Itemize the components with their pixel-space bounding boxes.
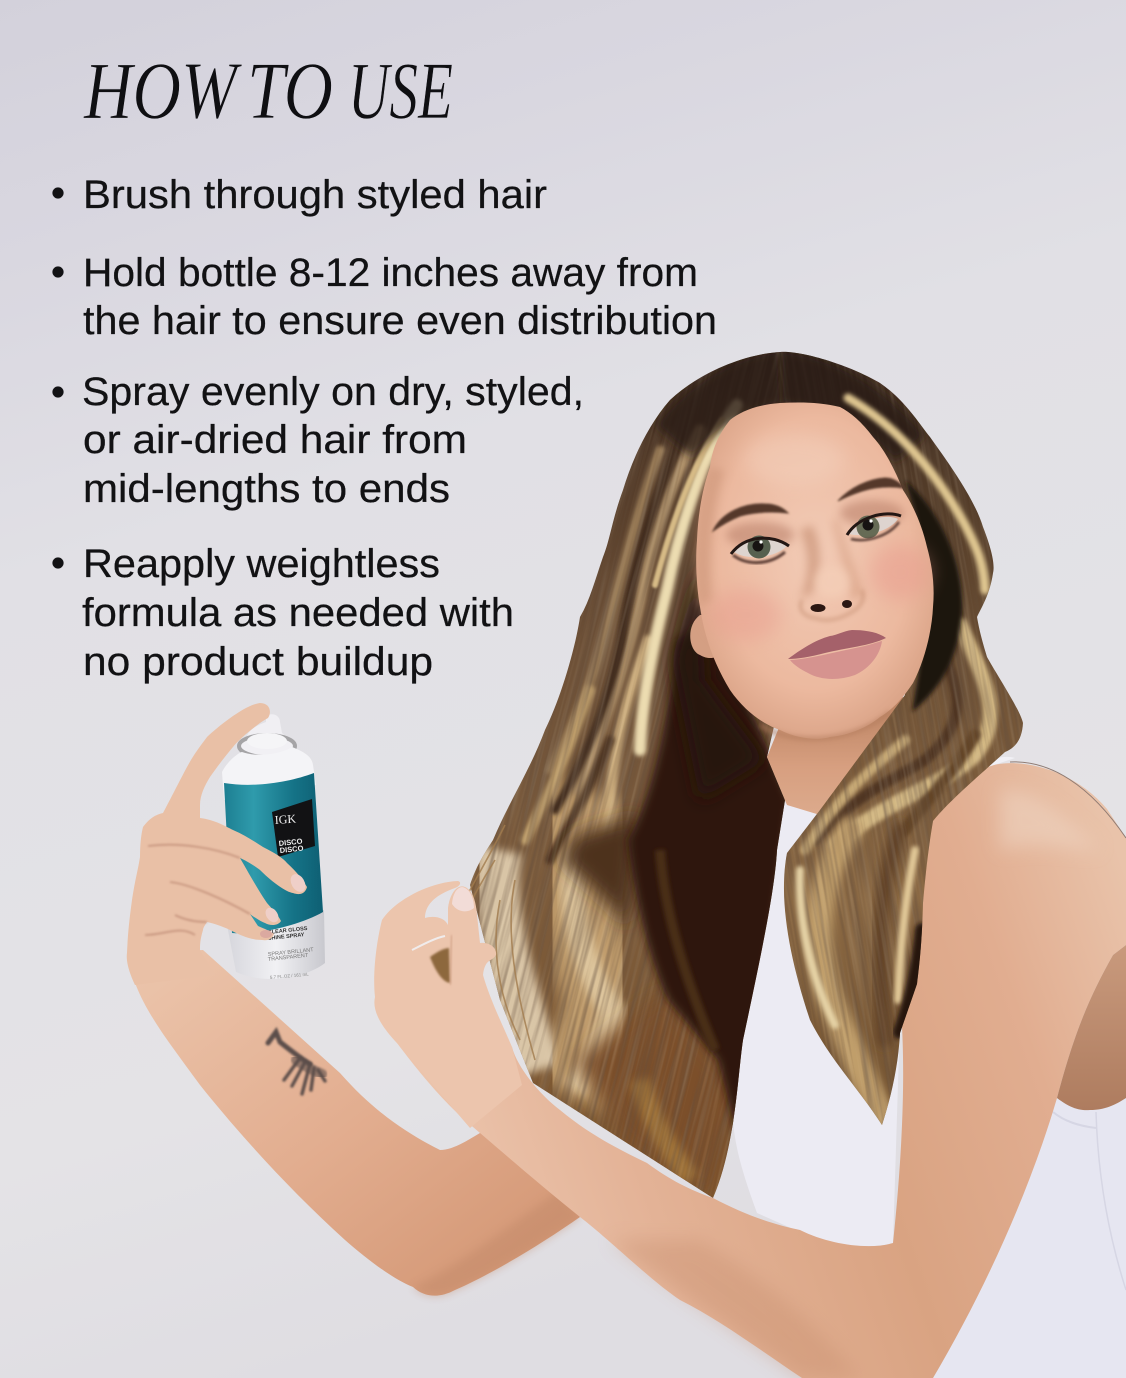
step 1: Brush through styled hair: [83, 173, 547, 217]
left hand fingers: [127, 703, 308, 985]
right arm and shoulder: [374, 762, 1126, 1378]
chin shadow: [760, 712, 890, 739]
step 3: or air-dried hair from: [83, 418, 467, 462]
bottle: DISCO: [279, 844, 304, 855]
strand between fingers: [430, 948, 450, 983]
small print: [268, 926, 315, 980]
sparse blond ends: [497, 850, 540, 1070]
lower arm shade: [610, 1240, 860, 1378]
step 2: the hair to ensure even distribution: [83, 299, 717, 343]
face: [690, 402, 934, 739]
step 4: Reapply weightless: [83, 542, 440, 586]
small print: SPRAY BRILLANT: [268, 947, 315, 958]
black label: [272, 799, 315, 857]
hair, right side: [780, 352, 1023, 1125]
small print: SHINE SPRAY: [268, 932, 305, 942]
neck: [767, 695, 925, 815]
shoulder line: [1010, 762, 1126, 838]
shoulder strap sliver: [975, 757, 1015, 768]
small print: TRANSPARENT: [268, 953, 309, 963]
teal band: [224, 773, 323, 933]
nails: [288, 872, 308, 894]
title: TO: [247, 45, 333, 136]
strand texture: [784, 352, 1020, 1122]
thumb nail: [452, 887, 474, 911]
bottle: DISCO: [278, 837, 303, 848]
eye sockets: [726, 522, 794, 548]
eye: right: [847, 514, 901, 540]
step 3: Spray evenly on dry, styled,: [82, 370, 584, 414]
small print: 5.7 FL.OZ / 161 mL: [270, 972, 309, 980]
nose: [800, 566, 863, 620]
main highlight: [640, 405, 737, 750]
flyaway strands: [437, 825, 535, 1060]
nose bridge shade: [800, 525, 820, 600]
back of the torso: [1057, 945, 1126, 1110]
face-framing highlights: [525, 430, 700, 860]
cheek blush: [709, 589, 781, 641]
step 3: [52, 370, 584, 511]
left arm with tattoo: [127, 950, 580, 1296]
title: USE: [348, 45, 453, 136]
step 2: Hold bottle 8-12 inches away from: [83, 251, 698, 295]
step 2: [52, 251, 717, 343]
shoulder highlight: [1000, 789, 1100, 850]
side shading near hairline: [696, 467, 725, 607]
crown darkness: [655, 350, 782, 458]
woman: [127, 251, 1126, 1378]
eyebrows: [713, 504, 788, 531]
title: HOW: [83, 45, 242, 136]
lower brown: [575, 990, 740, 1200]
body lower: [227, 910, 325, 979]
body top: [222, 747, 316, 800]
brand: IGK: [274, 812, 297, 827]
eye: left: [731, 536, 789, 563]
step 4: formula as needed with: [82, 591, 514, 635]
collar: [239, 735, 295, 757]
dark behind face: [905, 480, 962, 712]
dark patch upper mid: [560, 815, 640, 925]
tattoo: [268, 1032, 325, 1094]
bottle: [222, 714, 325, 980]
instructions list: [52, 173, 717, 684]
white top, chest side: [733, 803, 905, 1246]
step 3: mid-lengths to ends: [83, 467, 450, 511]
dark centre: [628, 620, 790, 1140]
strand texture: [476, 352, 784, 1191]
hair, left side: [470, 352, 785, 1198]
crown darkness: [780, 350, 925, 462]
white top, back side: [933, 1098, 1126, 1378]
ear: [690, 615, 720, 658]
right hand holding strand: [374, 881, 522, 1128]
step 4: no product buildup: [83, 640, 433, 684]
blond band: [570, 790, 605, 1095]
forehead glow: [745, 434, 845, 486]
small print: CLEAR GLOSS: [268, 926, 308, 936]
step 4: [52, 542, 514, 684]
nozzle: [247, 714, 287, 752]
lips: [788, 630, 886, 679]
